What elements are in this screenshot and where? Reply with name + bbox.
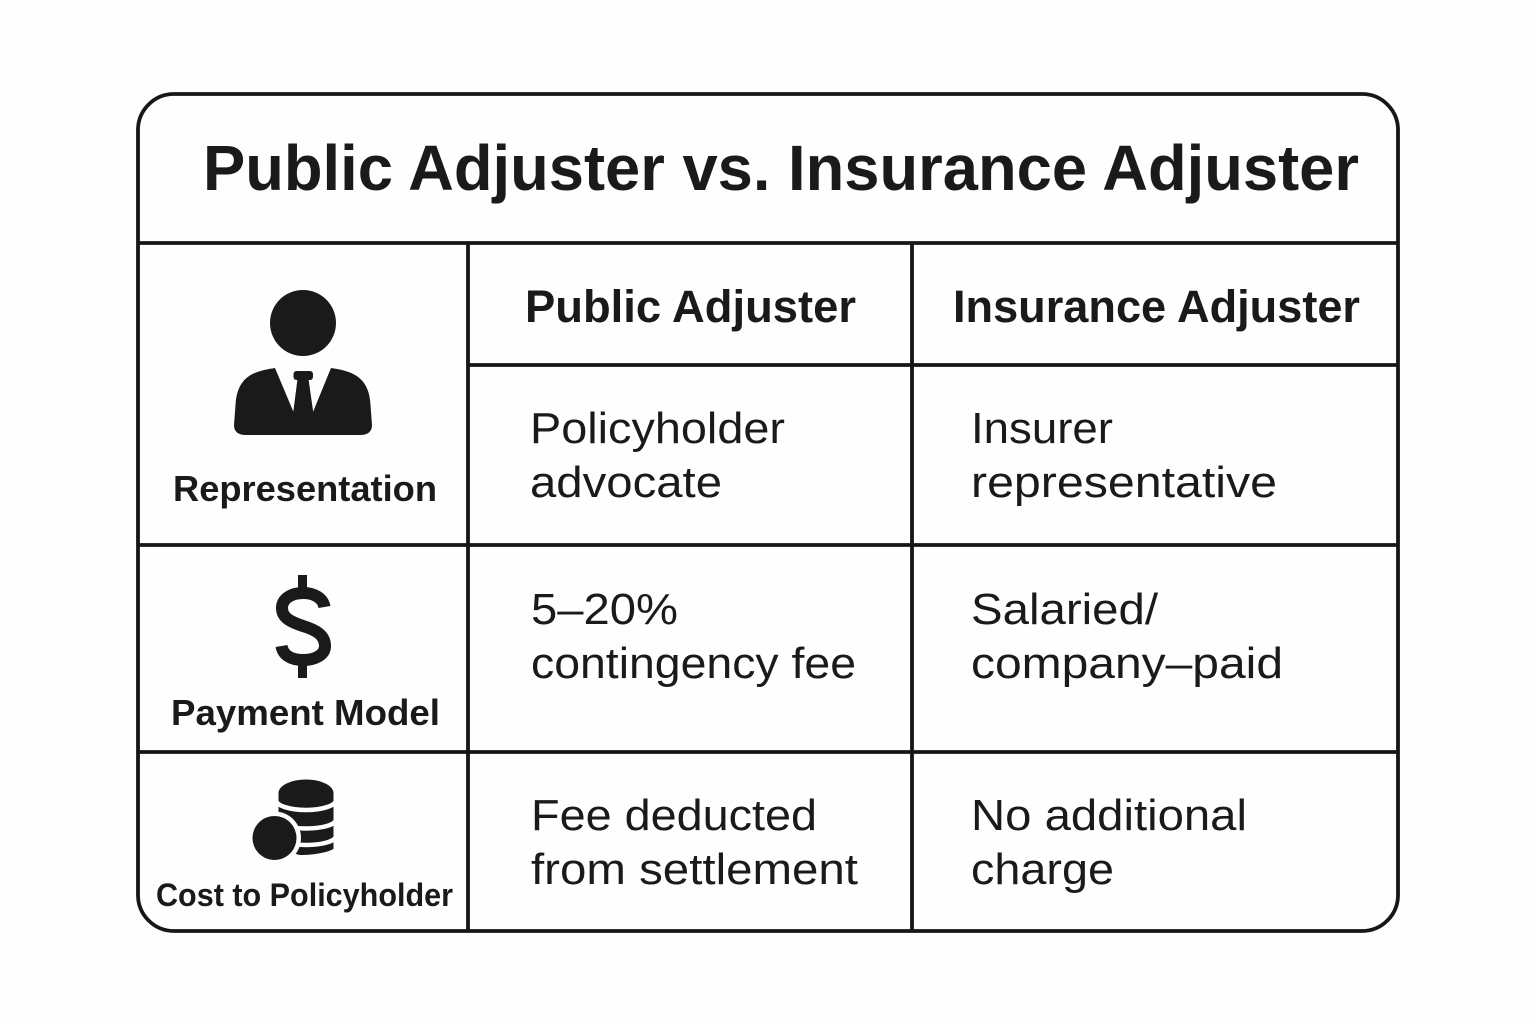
payment model: public adjuster value: contingency fee [531, 639, 856, 688]
table frame and grid [138, 94, 1398, 931]
label: payment model: Payment Model [171, 692, 440, 733]
payment model: insurance adjuster value: Salaried/ [971, 585, 1159, 634]
cost: public adjuster value [531, 791, 858, 894]
payment model: public adjuster value [531, 585, 856, 688]
row header: cost to policyholder [156, 780, 453, 913]
label: representation: Representation [173, 468, 437, 509]
cost: insurance adjuster value: charge [971, 845, 1114, 894]
row header: representation [173, 290, 437, 509]
payment model: insurance adjuster value: company–paid [971, 639, 1283, 688]
column heading: insurance adjuster: Insurance Adjuster [953, 281, 1360, 332]
cost: insurance adjuster value: No additional [971, 791, 1247, 840]
representation: public adjuster value: advocate [530, 458, 722, 507]
representation: public adjuster value [530, 404, 785, 507]
representation: insurance adjuster value: representative [971, 458, 1277, 507]
representation: insurance adjuster value: Insurer [971, 404, 1113, 453]
icon: stack of coins [248, 780, 336, 864]
representation: insurance adjuster value [971, 404, 1277, 507]
column heading: public adjuster: Public Adjuster [525, 281, 856, 332]
row header: payment model [171, 575, 440, 733]
title: Public Adjuster vs. Insurance Adjuster [203, 132, 1359, 204]
label: cost to policyholder: Cost to Policyholder [156, 877, 453, 913]
payment model: insurance adjuster value [971, 585, 1283, 688]
icon: dollar sign [282, 575, 325, 678]
cost: public adjuster value: from settlement [531, 845, 858, 894]
cost: public adjuster value: Fee deducted [531, 791, 817, 840]
icon: person in suit [234, 290, 372, 435]
cost: insurance adjuster value [971, 791, 1247, 894]
payment model: public adjuster value: 5–20% [531, 585, 678, 634]
representation: public adjuster value: Policyholder [530, 404, 785, 453]
